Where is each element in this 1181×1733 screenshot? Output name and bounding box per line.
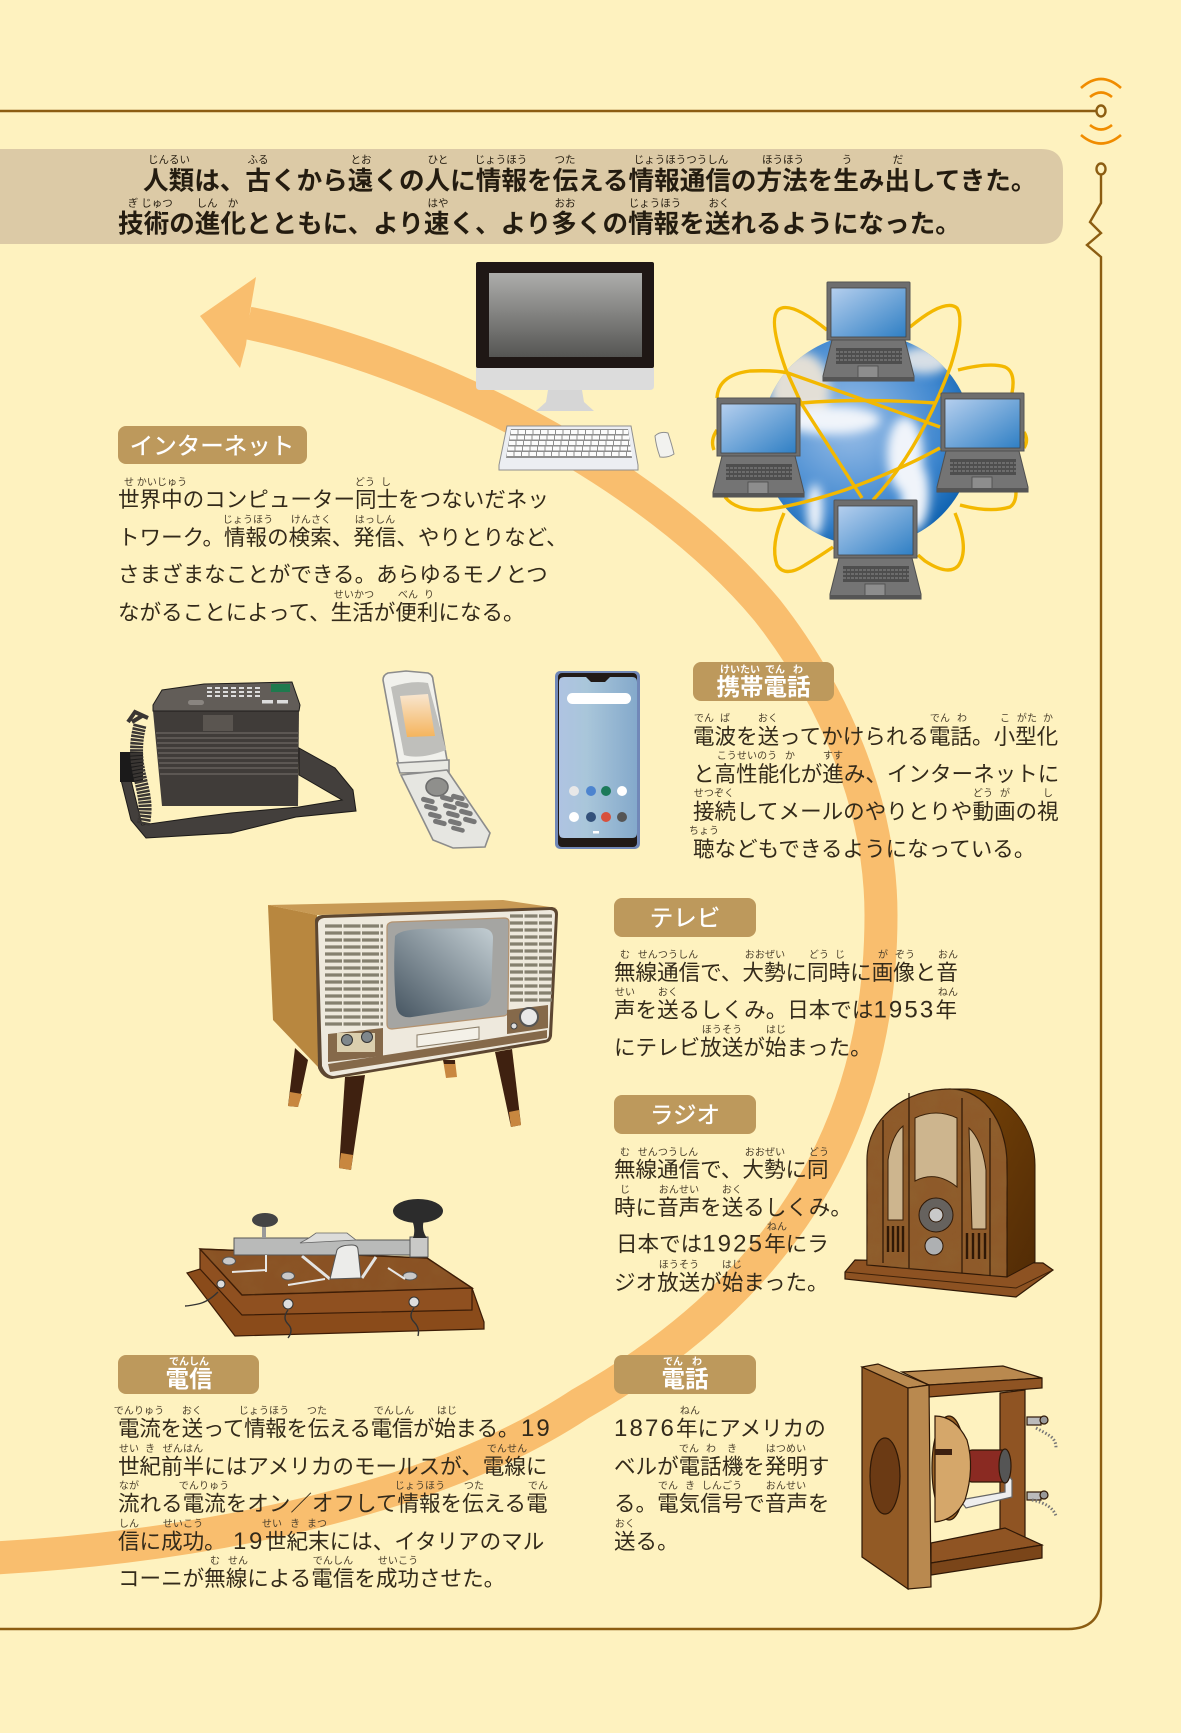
text block: telegraph: 電流を送って情報を伝える電信が始まる。: [118, 1416, 519, 1441]
label: telephone: [614, 1355, 756, 1394]
text block: telephone: [614, 1405, 829, 1554]
text block: internet: じょうほう: [223, 514, 273, 526]
text block: telegraph: ぜんはん: [163, 1443, 203, 1455]
intro text: じんるい: [148, 154, 190, 166]
text block: mobile phone: か: [1043, 712, 1053, 724]
text block: mobile phone: と高性能化が進み、インターネットに: [693, 762, 1059, 786]
text block: television: ぞう: [895, 949, 915, 961]
intro text: じゅつ: [141, 198, 173, 210]
text block: internet: どう: [355, 476, 375, 488]
text block: telegraph: でん: [528, 1480, 548, 1492]
illustration: vintage television: [268, 900, 558, 1170]
label: telegraph: [118, 1355, 259, 1394]
text block: television: おん: [938, 949, 958, 961]
label: radio: [614, 1095, 756, 1134]
label: internet: インターネット: [130, 433, 294, 459]
text block: radio: おんせい: [659, 1184, 699, 1196]
text block: telegraph: まつ: [307, 1518, 327, 1530]
label: television: [614, 898, 756, 937]
label: telephone: 電話: [662, 1366, 708, 1392]
text block: internet: トワーク。情報の検索、発信、やりとりなど、: [118, 525, 568, 550]
text block: radio: せんつうしん: [638, 1146, 698, 1158]
text block: telegraph: せい: [119, 1443, 139, 1455]
text block: telegraph: つた: [307, 1405, 327, 1417]
text block: telegraph: せい: [262, 1518, 282, 1530]
text block: mobile phone: せつぞく: [694, 788, 734, 800]
intro text: 技術の進化とともに、より速く、より多くの情報を送れるようになった。: [118, 210, 961, 238]
text block: telegraph: せん: [228, 1555, 248, 1567]
text block: radio: 時に音声を送るしくみ。: [614, 1195, 852, 1220]
text block: telephone: おく: [615, 1518, 635, 1530]
label: mobile phone: でん: [765, 664, 785, 676]
text block: mobile phone: 電波を送ってかけられる電話。小型化: [693, 724, 1058, 749]
text block: telegraph: でんしん: [374, 1405, 414, 1417]
text block: radio: 無線通信で、大勢に同: [614, 1157, 829, 1182]
intro text: [118, 154, 1036, 238]
text block: radio: む: [620, 1146, 630, 1158]
text block: mobile phone: 聴などもできるようになっている。: [693, 836, 1035, 862]
text block: telephone: わ: [706, 1443, 716, 1455]
illustration: cathedral radio: [845, 1089, 1053, 1297]
intro text: おく: [708, 198, 730, 210]
text block: radio: ジオ放送が始まった。: [614, 1270, 829, 1295]
text block: television: せんつうしん: [638, 949, 698, 961]
text block: television: どう: [809, 949, 829, 961]
text block: mobile phone: がた: [1017, 712, 1037, 724]
text block: internet: べん: [398, 589, 418, 601]
text block: radio: おおぜい: [745, 1146, 785, 1158]
text block: mobile phone: こうせいのう: [717, 750, 777, 762]
text block: telegraph: 世紀末には、イタリアのマル: [265, 1529, 544, 1554]
text block: telephone: き: [685, 1480, 695, 1492]
text block: internet: せ: [124, 476, 134, 488]
text block: television: ねん: [938, 986, 958, 998]
text block: telegraph: でんせん: [487, 1443, 527, 1455]
text block: radio: [614, 1146, 852, 1295]
intro text: だ: [893, 154, 903, 166]
intro text: はや: [428, 198, 448, 210]
intro text: つた: [554, 154, 576, 166]
label: telephone: わ: [692, 1356, 702, 1368]
label: telephone: でん: [663, 1356, 683, 1368]
text block: radio: ほうそう: [659, 1259, 699, 1271]
text block: radio: 日本では1925年にラ: [616, 1230, 829, 1258]
intro text: じょうほう: [475, 154, 527, 166]
text block: telephone: ベルが電話機を発明す: [614, 1454, 829, 1479]
label: telegraph: でんしん: [169, 1356, 209, 1368]
text block: internet: [118, 476, 568, 625]
text block: telegraph: はじ: [437, 1405, 457, 1417]
arrow: timeline band pointing to the present: [0, 277, 881, 1558]
text block: television: ほうそう: [702, 1024, 742, 1036]
text block: television: 無線通信で、大勢に同時に画像と音: [614, 960, 958, 985]
text block: internet: はっしん: [355, 514, 395, 526]
text block: telegraph: おく: [182, 1405, 202, 1417]
text block: internet: 世界中のコンピューター同士をつないだネッ: [118, 487, 549, 512]
illustration: desktop computer: [476, 262, 674, 470]
text block: television: にテレビ放送が始まった。: [614, 1035, 872, 1060]
text block: internet: し: [381, 476, 391, 488]
text block: telegraph: しん: [119, 1518, 139, 1530]
text block: television: じ: [835, 949, 845, 961]
text block: mobile phone: でん: [930, 712, 950, 724]
text block: television: せい: [615, 986, 635, 998]
text block: mobile phone: すす: [823, 750, 843, 762]
text block: telephone: ねん: [680, 1405, 700, 1417]
label: television: テレビ: [650, 905, 720, 931]
text block: telephone: はつめい: [766, 1443, 806, 1455]
text block: telegraph: なが: [119, 1479, 139, 1492]
illustration: telegraph key: [185, 1199, 484, 1338]
text block: mobile phone: か: [785, 750, 795, 762]
text block: telegraph: じょうほう: [395, 1480, 445, 1492]
text block: radio: ねん: [767, 1221, 787, 1233]
text block: television: おおぜい: [745, 949, 785, 961]
text block: telegraph: 世紀前半にはアメリカのモールスが、電線に: [118, 1454, 547, 1479]
intro text: とお: [350, 154, 372, 166]
text block: mobile phone: [689, 712, 1059, 862]
text block: mobile phone: こ: [1000, 714, 1010, 724]
text block: telegraph: む: [210, 1555, 220, 1567]
panel: intro banner: [0, 149, 1063, 244]
text block: telephone: き: [727, 1443, 737, 1455]
illustration: flip phone: [383, 671, 490, 848]
intro text: ほうほう: [762, 154, 804, 166]
text block: telegraph: 19: [521, 1415, 552, 1442]
text block: internet: さまざまなことができる。あらゆるモノとつ: [118, 562, 548, 587]
text block: telegraph: でんりゅう: [114, 1405, 164, 1417]
label: mobile phone: [693, 662, 834, 701]
text block: television: む: [620, 949, 630, 961]
label: internet: [118, 426, 307, 464]
text block: telegraph: せいこう: [163, 1518, 203, 1530]
intro text: ひと: [428, 154, 448, 166]
text block: radio: じ: [620, 1184, 630, 1196]
text block: telegraph: じょうほう: [239, 1405, 289, 1417]
text block: internet: ながることによって、生活が便利になる。: [118, 600, 525, 625]
text block: mobile phone: おく: [758, 712, 778, 724]
text block: internet: り: [424, 589, 434, 601]
illustration: globe with networked laptops: [713, 282, 1028, 599]
icon: signal waves: [1081, 79, 1121, 144]
text block: telegraph: き: [290, 1518, 300, 1530]
text block: telegraph: 信に成功。: [118, 1529, 226, 1554]
text block: telegraph: せいこう: [378, 1555, 418, 1567]
text block: telegraph: き: [145, 1443, 155, 1455]
text block: radio: おく: [722, 1184, 742, 1196]
intro text: 人類は、古くから遠くの人に情報を伝える情報通信の方法を生み出してきた。: [143, 166, 1036, 196]
intro text: おお: [554, 198, 576, 210]
text block: telegraph: でんりゅう: [179, 1480, 229, 1492]
intro text: う: [842, 154, 852, 166]
illustration: Bell telephone: [862, 1364, 1056, 1589]
label: mobile phone: けいたい: [720, 664, 760, 676]
intro text: しん: [196, 198, 218, 210]
text block: telegraph: 19: [233, 1528, 265, 1555]
text block: internet: かいじゅう: [137, 476, 187, 488]
intro text: ふる: [248, 154, 268, 166]
text block: television: [614, 948, 958, 1060]
text block: telephone: る。電気信号で音声を: [614, 1491, 829, 1516]
text block: telephone: でん: [658, 1480, 678, 1492]
text block: telegraph: コーニが無線による電信を成功させた。: [118, 1566, 505, 1591]
text block: internet: けんさく: [291, 514, 331, 526]
text block: mobile phone: し: [1043, 788, 1053, 800]
text block: television: が: [878, 948, 888, 961]
text block: television: おく: [658, 986, 678, 998]
text block: mobile phone: 接続してメールのやりとりや動画の視: [693, 799, 1059, 824]
text block: mobile phone: でん: [694, 712, 714, 724]
text block: internet: せいかつ: [334, 589, 374, 601]
text block: television: 声を送るしくみ。日本では1953年: [614, 996, 957, 1024]
text block: radio: どう: [809, 1146, 829, 1158]
label: mobile phone: 携帯電話: [716, 674, 810, 700]
text block: radio: はじ: [722, 1259, 742, 1271]
text block: telephone: しんごう: [702, 1479, 742, 1492]
intro text: じょうほう: [629, 198, 681, 210]
text block: mobile phone: が: [1000, 786, 1010, 800]
text block: telephone: おんせい: [766, 1480, 806, 1492]
text block: telegraph: [114, 1405, 552, 1591]
intro text: じょうほうつうしん: [634, 154, 728, 166]
label: mobile phone: わ: [793, 664, 803, 676]
intro text: ぎ: [128, 196, 138, 210]
text block: mobile phone: わ: [957, 712, 967, 724]
text block: television: はじ: [766, 1024, 786, 1036]
text block: mobile phone: ば: [720, 712, 730, 724]
text block: telephone: 1876年にアメリカの: [614, 1415, 826, 1442]
text block: telegraph: 流れる電流をオン／オフして情報を伝える電: [118, 1491, 548, 1516]
text block: telephone: 送る。: [614, 1529, 679, 1554]
text block: telephone: でん: [679, 1443, 699, 1455]
text block: mobile phone: どう: [973, 788, 993, 800]
illustration: shoulder phone: [120, 682, 356, 838]
label: radio: ラジオ: [650, 1102, 720, 1128]
label: telegraph: 電信: [166, 1366, 212, 1392]
illustration: smartphone: [555, 671, 640, 849]
text block: mobile phone: ちょう: [689, 825, 719, 837]
text block: telegraph: つた: [464, 1480, 484, 1492]
text block: telegraph: でんしん: [313, 1555, 353, 1567]
intro text: か: [228, 198, 239, 210]
